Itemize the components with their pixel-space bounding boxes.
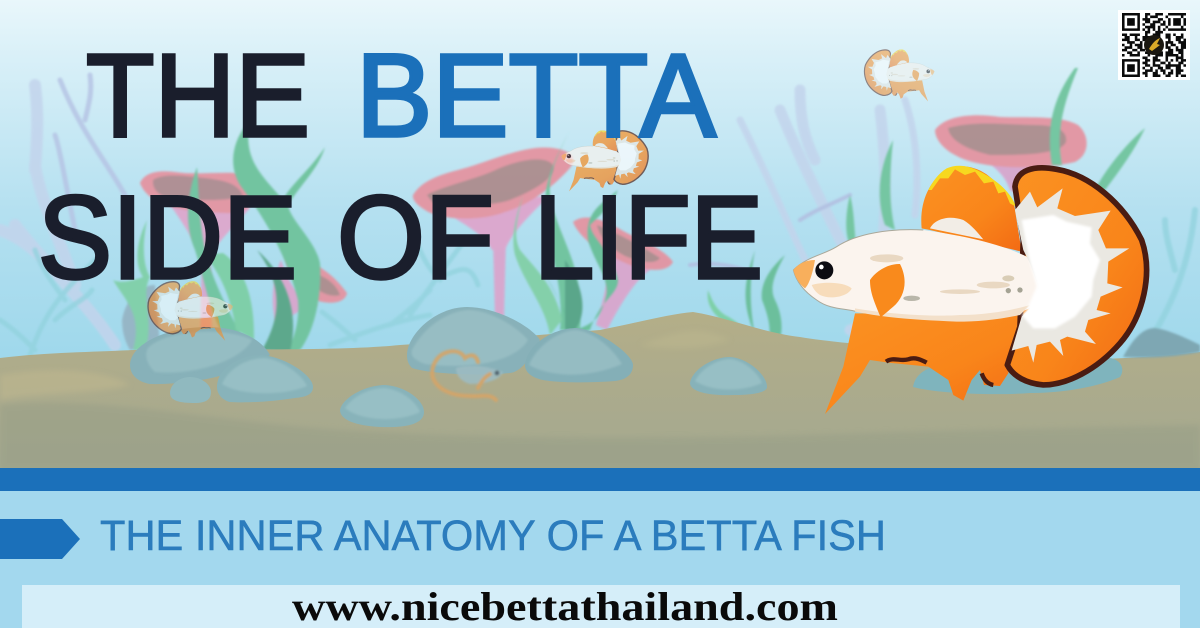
arrow marker (0, 519, 80, 559)
sea floor (0, 312, 1200, 470)
title word: BETTA: BETTA (356, 30, 716, 162)
section band (0, 468, 1200, 491)
body belly tint (855, 305, 1030, 322)
seaweed: centre cluster (513, 130, 618, 335)
small fish: top right (864, 49, 934, 102)
mushroom coral: centre (413, 147, 573, 320)
small fish: lower left (148, 281, 233, 341)
rock under large fish (913, 358, 1122, 394)
rock behind large fish (1123, 328, 1200, 357)
QR code (1118, 10, 1190, 80)
pale lavender coral branches (0, 75, 925, 345)
body (793, 230, 1039, 320)
dorsal fin (921, 166, 1022, 252)
mushroom coral: right of centre (573, 217, 673, 330)
section background (0, 491, 1200, 628)
sea floor shading (0, 331, 1200, 470)
anal fin dark edge (886, 358, 993, 385)
section heading: THE INNER ANATOMY OF A BETTA FISH (100, 512, 886, 560)
seaweed: left cluster (113, 120, 325, 357)
small fish: ghost outline on sand (432, 351, 503, 400)
rocks: centre group (407, 307, 633, 382)
teal coral branches (0, 210, 1195, 355)
title word: THE: THE (86, 30, 310, 162)
caudal fin (1007, 168, 1147, 385)
seaweed: near large fish (708, 68, 1145, 365)
rocks: left group (130, 327, 313, 403)
eye (815, 261, 833, 279)
grey rock behind left weeds (122, 285, 160, 350)
body outline (793, 230, 923, 312)
rock: right (690, 357, 767, 395)
snout (793, 260, 815, 288)
title word: SIDE: SIDE (38, 172, 297, 304)
large betta fish (793, 166, 1147, 414)
caudal fin white centre (1022, 215, 1100, 328)
anal fin (825, 313, 1022, 414)
QR logo (1144, 35, 1164, 55)
caudal fin white burst (1012, 188, 1129, 363)
cheek (812, 283, 852, 297)
title word: LIFE: LIFE (534, 172, 763, 304)
small fish: upper centre (561, 130, 648, 191)
mushroom coral: behind large fish (935, 115, 1087, 200)
title word: OF: OF (337, 172, 494, 304)
pectoral fin (870, 264, 905, 317)
website URL: www.nicebettathailand.com (292, 584, 838, 628)
content panel (22, 585, 1180, 628)
body spots (870, 254, 1023, 301)
title (38, 30, 763, 304)
mushroom coral: lower left (273, 250, 347, 327)
mushroom coral: left (140, 171, 260, 340)
rock: front (340, 385, 424, 427)
background: aquarium water (0, 0, 1200, 470)
